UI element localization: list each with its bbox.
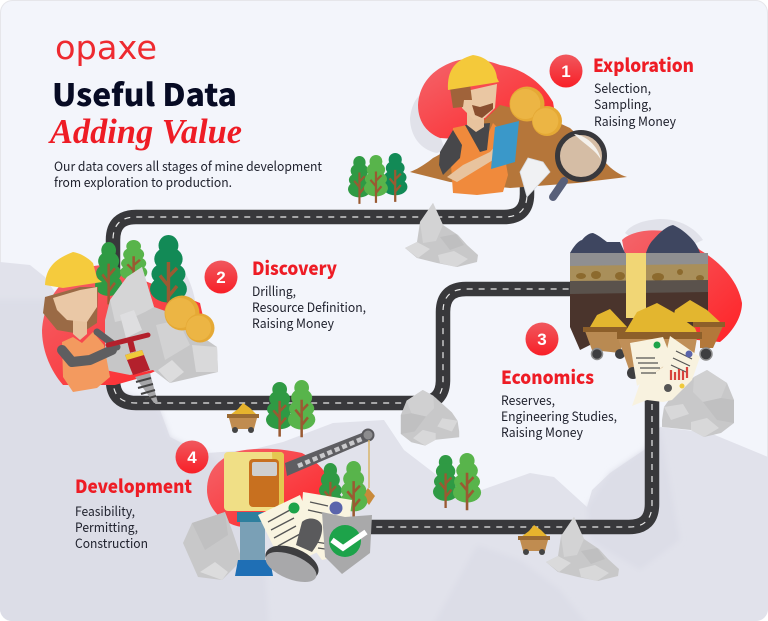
step 3 text: Economics [501, 364, 594, 390]
step 1 badge: 1 [561, 62, 571, 81]
illustration: development [183, 430, 375, 588]
intro text: from exploration to production. [54, 172, 232, 191]
step 4 badge [176, 440, 208, 474]
rock: bottom road [546, 517, 619, 581]
road [113, 185, 652, 527]
step 1 badge [550, 54, 582, 88]
step 2 text: Resource Definition, [252, 297, 366, 316]
step 3 text: Engineering Studies, [501, 406, 617, 425]
mountains [0, 262, 768, 621]
step 4 text: Permitting, [75, 517, 138, 536]
rock: road 2 [401, 390, 459, 446]
step 1 text: Raising Money [594, 111, 676, 130]
step 4 text [75, 473, 192, 552]
rock: top road [405, 203, 478, 267]
step 3 text: Raising Money [501, 422, 583, 441]
trees: road 2 [266, 380, 315, 437]
step 1 text: Selection, [594, 78, 651, 97]
step 4 text: Construction [75, 533, 148, 552]
trees: top cluster [348, 153, 407, 204]
step 4 text: Development [75, 473, 192, 499]
intro text: Our data covers all stages of mine development [54, 156, 322, 175]
step 2 text: Discovery [252, 255, 337, 281]
step 2 text [252, 255, 366, 332]
step 3 badge [526, 322, 558, 356]
logo: opaxe [55, 28, 157, 67]
step 2 text: Raising Money [252, 313, 334, 332]
intro text [54, 156, 322, 191]
step 3 text: Reserves, [501, 390, 555, 409]
step 1 text [593, 52, 694, 130]
step 2 badge [204, 260, 238, 294]
step 4 text: Feasibility, [75, 501, 135, 520]
illustration: exploration [410, 55, 627, 197]
step 2 text: Drilling, [252, 281, 296, 300]
trees: lower [433, 453, 481, 510]
title: Useful Data [52, 70, 237, 115]
cart: road 2 [227, 403, 259, 433]
step 2 badge: 2 [216, 268, 226, 287]
step 1 text: Exploration [593, 52, 694, 78]
step 3 text [501, 364, 617, 441]
step 4 badge: 4 [187, 448, 197, 467]
illustration: economics [570, 219, 742, 437]
cart: bottom road [518, 525, 550, 555]
subtitle: adding value: Adding Value [48, 112, 242, 151]
illustration: discovery [42, 235, 218, 403]
step 3 badge: 3 [537, 330, 547, 349]
step 1 text: Sampling, [594, 94, 652, 113]
